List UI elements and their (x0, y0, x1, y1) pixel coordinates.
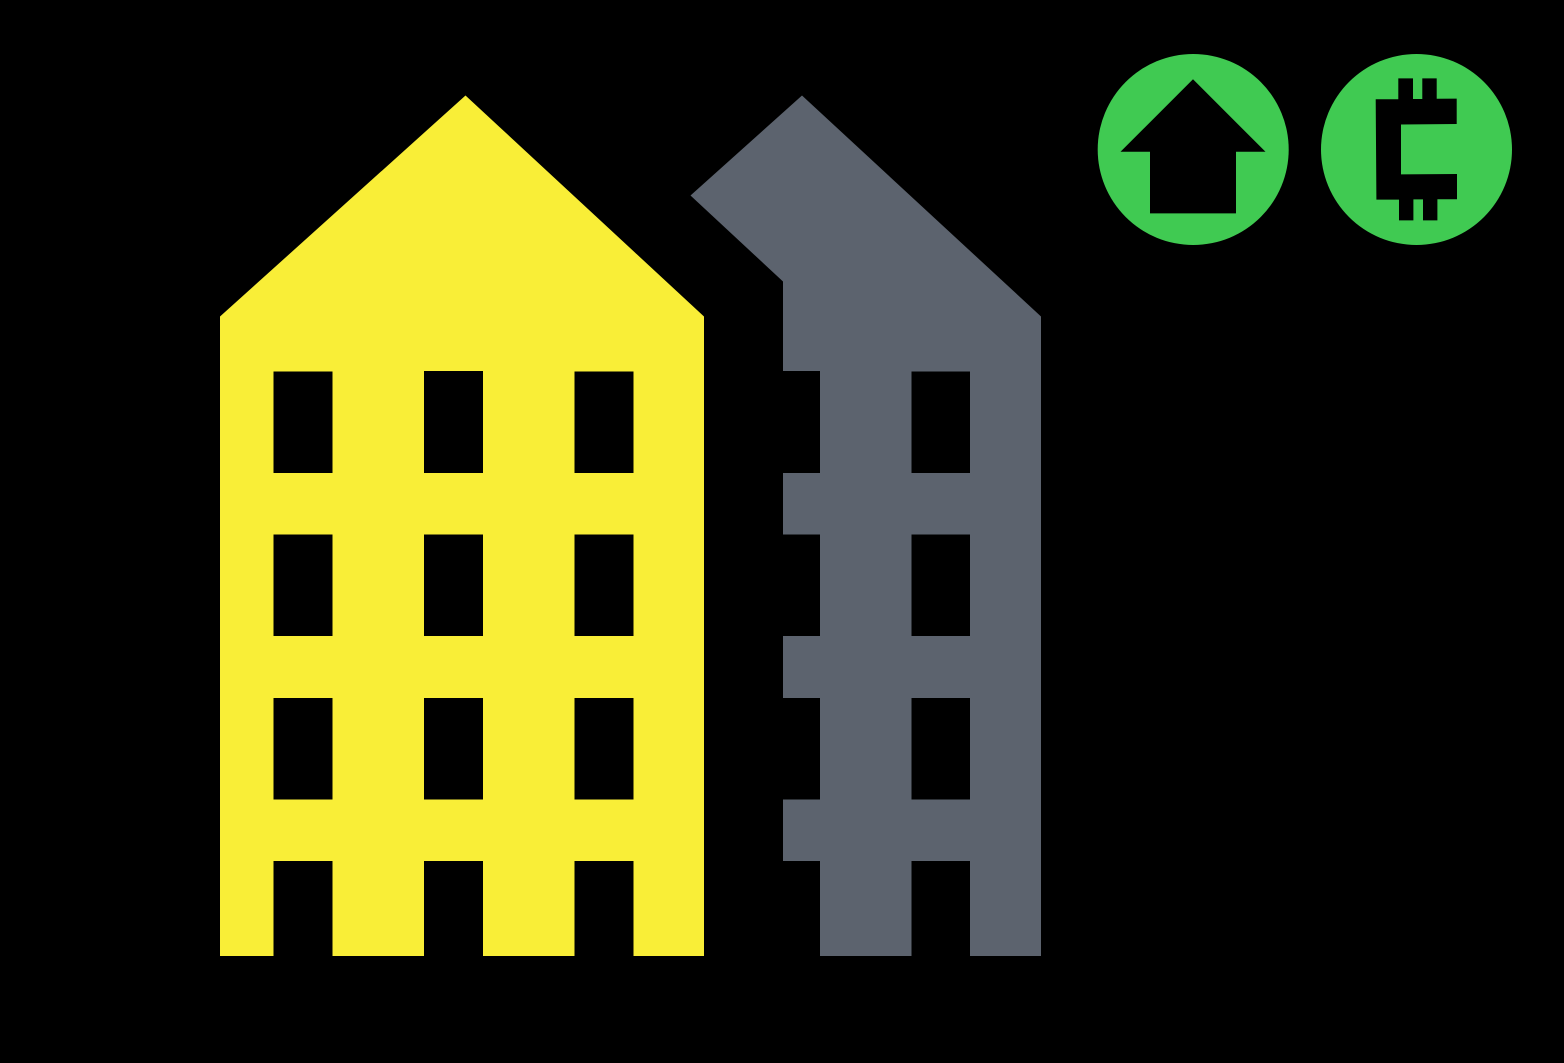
icon: bitcoin symbol (1321, 54, 1512, 245)
building: yellow (220, 96, 704, 956)
building: grey (690, 96, 1041, 956)
icon: house price up arrow (1098, 54, 1289, 245)
